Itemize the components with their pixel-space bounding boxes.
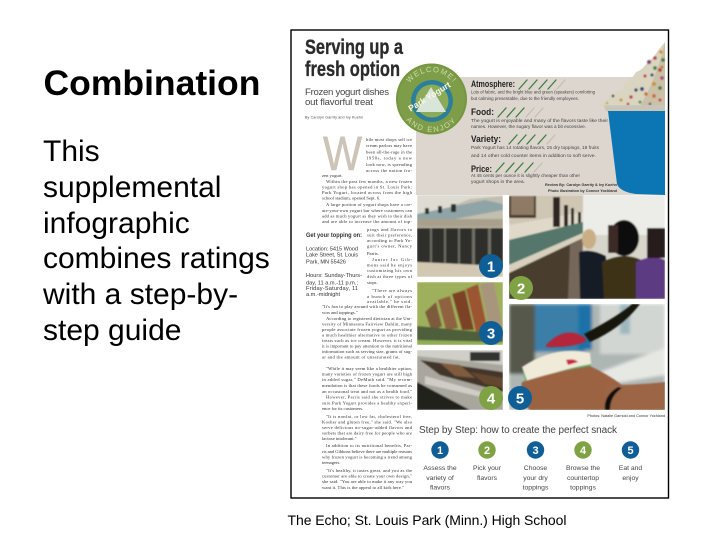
- review credits: [545, 183, 618, 193]
- newspaper headline: fresh option: [305, 58, 400, 81]
- photo number badges: 5: [516, 390, 524, 408]
- step 2: flavors: [477, 475, 498, 482]
- step 4: [566, 441, 600, 492]
- article text: ence for its customers.: [322, 406, 363, 411]
- article text: "It is nonfat, or low fat, cholesterol free,: [326, 414, 412, 420]
- icon: Park Yogurt logo: Park Yogurt: [406, 79, 452, 113]
- step 4: Browse the: [566, 465, 600, 472]
- photo number badges: 4: [487, 390, 496, 408]
- article text: serve delicious no-sugar-added flavors and: [322, 425, 413, 430]
- article text: want it. This is the appeal to all kids here.": [322, 485, 404, 490]
- article text: mendation is that these foods be consumed as: [322, 383, 412, 388]
- article text: pings and flavors to: [367, 227, 413, 232]
- sidebar: location and hours: Get your topping on:: [306, 232, 362, 239]
- article text: an occasional treat and not as a health food.": [322, 389, 412, 394]
- sidebar: location and hours: day, 11 a.m.-11 p.m.;: [306, 280, 358, 286]
- newspaper subheading: out flavorful treat: [305, 97, 373, 108]
- rating: variety: Variety:: [471, 134, 501, 144]
- article text: "It's healthy, it tastes great, and you as the: [326, 468, 412, 474]
- article text: "While it may seem like a healthier option,: [326, 366, 412, 372]
- rating: variety: [471, 134, 600, 158]
- article text: ate-your-own yogurt bar where customers can: [322, 208, 413, 213]
- rating: food: [471, 107, 609, 129]
- photo credit: Photos: Natalie Garnold and Connor Yochland: [587, 414, 665, 418]
- text block: description: supplemental: [43, 171, 221, 204]
- article text: lactose intolerant.": [322, 436, 357, 441]
- article text: a much healthier alternative to other frozen: [322, 332, 413, 338]
- step 3: 3: [532, 445, 539, 457]
- photo number badges: 2: [517, 280, 525, 298]
- article text: yogurt shop has opened in St. Louis Park:: [322, 184, 412, 190]
- step 1: flavors: [430, 484, 451, 492]
- article text: school stadium, opened Sept. 6.: [322, 196, 380, 202]
- article text: vors and toppings.": [322, 310, 358, 315]
- article text: However, Parris said she strives to make: [326, 394, 412, 400]
- photo number badges: 3: [487, 326, 495, 342]
- heading: Combination: Combination: [44, 63, 260, 103]
- article text: versity of Minnesota Fairview Dahlin, many: [322, 322, 413, 328]
- review credits: Photo Illustration by Connor Yochland: [548, 189, 618, 193]
- rating: price: yogurt shops in the area.: [471, 179, 525, 184]
- sidebar: location and hours: Friday-Saturday, 11: [306, 286, 358, 292]
- text block: description: combines ratings: [43, 242, 270, 275]
- article text: she said. "You are able to make it any way you: [322, 479, 413, 484]
- step 5: 5: [627, 445, 634, 457]
- article text: mons said he enjoys: [367, 262, 412, 268]
- caption: source: The Echo; St. Louis Park (Minn.) High School: [288, 512, 566, 528]
- article text: and are able to increase the amount of top-: [322, 219, 412, 224]
- article text: According to registered dietician at the Uni-: [326, 316, 412, 321]
- photo 5: yogurt cup in hand: [509, 304, 665, 410]
- photo 2: customers at machines: [509, 195, 665, 299]
- article text: customer are able to create your own design,": [322, 474, 412, 480]
- article text: teenagers.: [322, 460, 340, 465]
- sidebar: location and hours: Park, MN 55426: [306, 260, 346, 266]
- rating: food: Food:: [471, 107, 494, 117]
- text block: description: This: [43, 135, 100, 168]
- article text: 1950s, today a new: [366, 156, 413, 162]
- step 4: 4: [580, 445, 587, 457]
- article text: Parris.: [367, 251, 379, 256]
- rating: atmosphere: [471, 79, 595, 101]
- article text: why frozen yogurt is becoming a trend among: [322, 454, 413, 460]
- step 3: [523, 441, 549, 492]
- step 5: Eat and: [619, 465, 642, 472]
- article text: been all-the-rage in the: [366, 149, 412, 154]
- text block: description: [42, 135, 270, 347]
- step by step heading: Step by Step: how to create the perfect snack: [419, 425, 618, 436]
- review credits: Review By: Carolyn Garrity & Ivy Kuehn: [545, 183, 618, 187]
- rating: atmosphere: Atmosphere:: [471, 79, 515, 89]
- article text: sure Park Yogurt provides a healthy experi-: [322, 400, 412, 406]
- icon: frozen yogurt cup: [600, 42, 665, 195]
- article text: according to Park Yo-: [367, 238, 412, 243]
- article text: a bunch of options: [367, 294, 412, 299]
- step 1: [423, 441, 457, 492]
- photo 3: dry toppings: [417, 282, 503, 345]
- article text: [322, 137, 413, 490]
- icon: Park Yogurt logo: WELCOME!: [406, 66, 456, 82]
- article text: suit their preference,: [367, 232, 412, 238]
- text block: description: step guide: [43, 314, 181, 347]
- sidebar: location and hours: a.m.-midnight: [306, 292, 340, 298]
- article text: it is important to pay attention to the nutritional: [322, 344, 413, 348]
- article text: A large portion of yogurt shops have a cre-: [326, 202, 412, 207]
- article text: Junior Jac Gib-: [372, 257, 412, 262]
- article text: "There are always: [372, 288, 412, 293]
- article text: Within the past few months, a new frozen: [326, 179, 413, 185]
- article text: many varieties of frozen yogurt are still high: [322, 372, 413, 376]
- article text: stops.: [367, 280, 378, 285]
- step 1: variety of: [426, 475, 454, 482]
- article text: treats such as ice cream. However, it is vital: [322, 338, 413, 344]
- newspaper subheading: Frozen yogurt dishes: [305, 87, 389, 98]
- step 1: 1: [437, 445, 443, 457]
- article text: In addition to its nutritional benefits, Par-: [326, 443, 412, 449]
- byline: By Carolyn Garrity and Ivy Kuehn: [305, 116, 363, 120]
- article text: dish at three types of: [367, 274, 412, 279]
- article text: people associate frozen yogurt as providing: [322, 327, 413, 332]
- rating: food: The yogurt is enjoyable and many of the flavors taste like their: [471, 118, 609, 123]
- step 5: [619, 441, 642, 482]
- step 5: enjoy: [622, 475, 639, 482]
- photo number badges: 1: [487, 258, 495, 276]
- article text: add as much yogurt as they wish to their dish: [322, 214, 413, 218]
- article text: Park Yogurt, located across from the high: [322, 190, 413, 196]
- newspaper headline: [305, 36, 403, 81]
- text block: description: with a step-by-: [42, 278, 238, 311]
- article text: Kosher and gluten free," she said. "We also: [322, 420, 413, 426]
- step 4: countertop: [567, 475, 599, 482]
- step 3: your dry: [523, 475, 548, 482]
- article text: look now, is spreading: [366, 162, 413, 168]
- article text: in added sugar," DeMuth said. "My recom-: [322, 377, 412, 383]
- article text: ar and the amount of unsaturated fat.: [322, 354, 400, 360]
- sidebar: location and hours: Lake Street, St. Louis: [306, 252, 358, 258]
- icon: Park Yogurt logo: [396, 64, 467, 134]
- step 2: Pick your: [473, 465, 502, 472]
- step 2: 2: [484, 445, 490, 457]
- article text: "It's fun to play around with the different fla-: [322, 304, 412, 309]
- photo 1: yogurt machines: [417, 195, 503, 277]
- rating: atmosphere: but calming presentable, due to the friendly employees.: [471, 96, 579, 101]
- article text: hile most shops sell ice: [366, 137, 412, 142]
- step 4: toppings: [570, 484, 596, 492]
- article text: zen yogurt.: [322, 173, 343, 178]
- rating: price: Price:: [471, 164, 492, 174]
- article text: ris and Gibbons believe there are multiple reasons: [322, 449, 412, 454]
- article text: gurt's owner, Nancy: [367, 244, 413, 250]
- step 2: [473, 441, 502, 482]
- sidebar: location and hours: Location: 5415 Wood: [306, 246, 358, 252]
- article text: cream parlors may have: [366, 143, 412, 148]
- article text: information such as serving size, grams of sug-: [322, 349, 412, 355]
- step 1: Assess the: [423, 465, 457, 472]
- article text: available," he said.: [367, 299, 412, 305]
- text block: description: infographic: [43, 207, 190, 240]
- icon: Park Yogurt logo: AND ENJOY: [406, 118, 454, 132]
- panel: newspaper page: [290, 29, 670, 499]
- rating: price: At 45 cents per ounce it is slightly cheaper than other: [471, 173, 581, 178]
- step 3: Choose: [524, 465, 547, 472]
- rating: variety: Park Yogurt has 14 rotating flavors, 15 dry toppings, 18 fruits: [471, 145, 600, 150]
- rating: price: [471, 163, 581, 184]
- sidebar: location and hours: [306, 232, 362, 298]
- photo 4: counter toppings: [417, 350, 503, 410]
- newspaper subheading: [305, 87, 389, 108]
- drop cap: W: [323, 128, 363, 181]
- rating: food: names. However, the sugary flavor was a bit excessive.: [471, 124, 586, 129]
- rating: atmosphere: Lots of fabric, and the bright blue and green (speakers) comforting: [471, 90, 595, 94]
- article text: sorbets that are dairy free for people who are: [322, 430, 412, 436]
- step 3: toppings: [523, 484, 549, 492]
- photo number badges: [479, 254, 533, 410]
- article text: customizing his own: [367, 268, 413, 273]
- article text: across the nation fro-: [366, 168, 412, 173]
- newspaper headline: Serving up a: [305, 36, 403, 59]
- sidebar: location and hours: Hours: Sunday-Thurs-: [306, 273, 362, 279]
- rating: variety: and 14 other cold counter items in addition to soft serve.: [471, 153, 596, 158]
- panel: ratings background: [416, 77, 665, 195]
